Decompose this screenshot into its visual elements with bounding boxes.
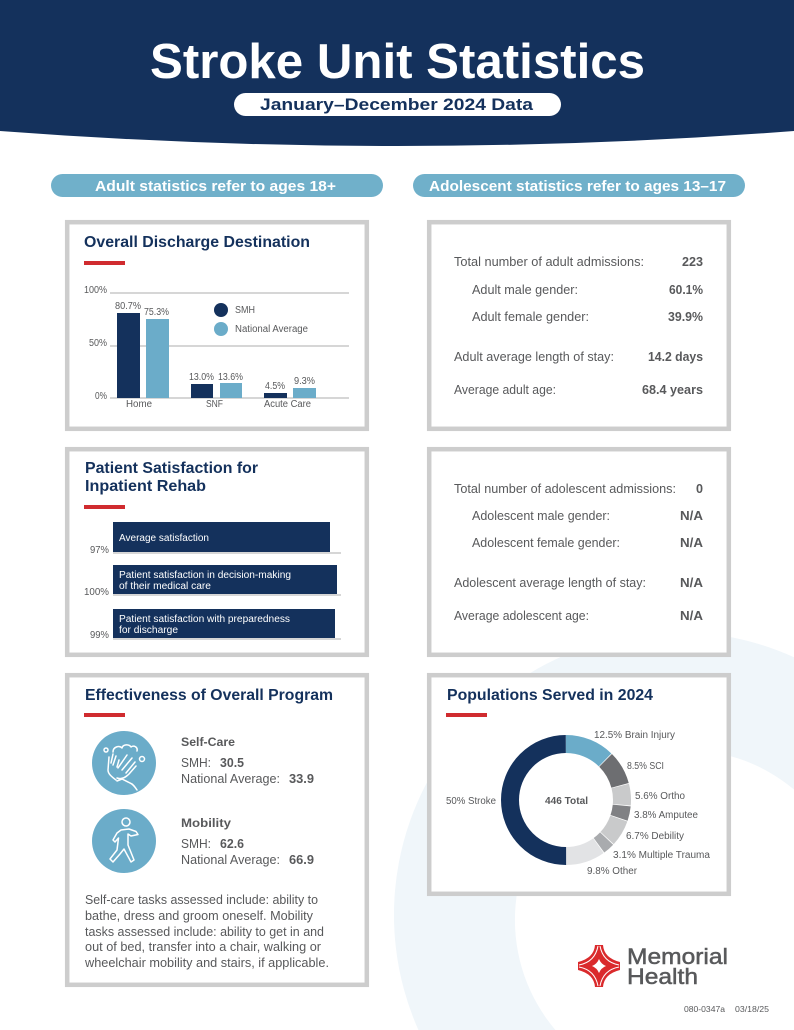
icon: washing hands xyxy=(92,731,156,795)
adolescent age row: Average adolescent age: xyxy=(454,609,589,623)
bar chart: satisfaction: 100% xyxy=(84,587,109,598)
logo: Memorial Health: Memorial xyxy=(627,944,728,969)
donut labels: 12.5% Brain Injury xyxy=(594,730,675,741)
bar chart: discharge destination: Home xyxy=(126,399,152,410)
donut chart xyxy=(510,744,622,856)
self-care stats: 33.9 xyxy=(289,772,314,786)
donut labels: 8.5% SCI xyxy=(627,761,664,772)
bar chart: satisfaction: Average satisfaction xyxy=(119,533,209,544)
donut labels: 6.7% Debility xyxy=(626,831,684,842)
heading: discharge: Overall Discharge Destination xyxy=(84,234,310,251)
adult length of stay row: Adult average length of stay: xyxy=(454,350,614,364)
mobility stats: 62.6 xyxy=(220,837,244,851)
bar chart: satisfaction: of their medical care xyxy=(119,581,211,592)
donut labels: 9.8% Other xyxy=(587,866,638,877)
adult male row xyxy=(472,283,703,297)
adolescent age row xyxy=(454,609,703,623)
footer codes: 03/18/25 xyxy=(735,1005,770,1014)
bar chart: discharge destination: 13.0% xyxy=(189,372,214,383)
adult female row: Adult female gender: xyxy=(472,310,589,324)
bar chart: satisfaction xyxy=(84,522,341,641)
adult age note pill xyxy=(51,174,383,197)
adult age note pill: Adult statistics refer to ages 18+ xyxy=(95,178,336,195)
adult admissions row: Total number of adult admissions: xyxy=(454,255,644,269)
adult admissions row: 223 xyxy=(682,255,703,269)
adult age row: 68.4 years xyxy=(642,383,703,397)
adolescent age note pill: Adolescent statistics refer to ages 13–17 xyxy=(429,178,726,195)
donut labels: 50% Stroke xyxy=(446,796,496,807)
adolescent female row: Adolescent female gender: xyxy=(472,536,620,550)
adult male row: 60.1% xyxy=(669,283,703,297)
adolescent male row: Adolescent male gender: xyxy=(472,509,610,523)
adolescent length of stay row: Adolescent average length of stay: xyxy=(454,576,646,590)
bar chart: satisfaction: 97% xyxy=(90,545,109,556)
mobility stats xyxy=(181,816,314,867)
explanatory paragraph: Self-care tasks assessed include: ability to xyxy=(85,893,318,907)
self-care stats: Self-Care xyxy=(181,735,235,749)
chart legend: SMH xyxy=(235,305,255,316)
self-care stats xyxy=(181,735,314,786)
bar chart: satisfaction: for discharge xyxy=(119,625,178,636)
panel: overall discharge destination xyxy=(67,222,367,429)
mobility stats: Mobility xyxy=(181,816,231,830)
self-care stats: SMH: xyxy=(181,756,211,770)
logo: Memorial Health: Health xyxy=(627,964,698,989)
bar chart: discharge destination: 13.6% xyxy=(218,372,243,383)
mobility stats: National Average: xyxy=(181,853,280,867)
bar chart: discharge destination: 9.3% xyxy=(294,376,315,387)
adult female row: 39.9% xyxy=(668,310,703,324)
explanatory paragraph: wheelchair mobility and stairs, if applicable. xyxy=(84,956,329,970)
adult age row xyxy=(454,383,703,397)
adolescent age note pill xyxy=(413,174,745,197)
bar chart: discharge destination: 50% xyxy=(89,338,107,349)
adult length of stay row xyxy=(454,350,703,364)
panel: patient satisfaction xyxy=(67,449,367,655)
adolescent female row: N/A xyxy=(680,536,703,550)
explanatory paragraph: tasks assessed include: ability to get in and xyxy=(85,925,324,939)
mobility stats: 66.9 xyxy=(289,853,314,867)
bar chart: discharge destination xyxy=(84,285,349,410)
panel: populations served xyxy=(429,675,729,894)
adult male row: Adult male gender: xyxy=(472,283,578,297)
date range pill: January–December 2024 Data xyxy=(260,95,534,114)
bar chart: discharge destination: 75.3% xyxy=(144,307,169,318)
bar chart: discharge destination: 100% xyxy=(84,285,107,296)
icon: logo star xyxy=(578,945,620,987)
adolescent age row: N/A xyxy=(680,609,703,623)
bar chart: satisfaction: Patient satisfaction with preparedness xyxy=(119,614,290,625)
bar chart: discharge destination: Acute Care xyxy=(264,399,311,410)
donut labels: 5.6% Ortho xyxy=(635,791,685,802)
bar chart: satisfaction: 99% xyxy=(90,630,109,641)
donut labels: 3.8% Amputee xyxy=(634,810,698,821)
adolescent admissions row: Total number of adolescent admissions: xyxy=(454,482,676,496)
footer codes xyxy=(684,1005,770,1014)
adolescent male row xyxy=(472,509,703,523)
footer codes: 080-0347a xyxy=(684,1005,726,1014)
self-care stats: 30.5 xyxy=(220,756,244,770)
heading: satisfaction: Inpatient Rehab xyxy=(85,478,206,495)
logo: Memorial Health xyxy=(578,944,728,989)
heading: populations: Populations Served in 2024 xyxy=(447,687,653,704)
adult length of stay row: 14.2 days xyxy=(648,350,703,364)
mobility stats: SMH: xyxy=(181,837,211,851)
panel: adolescent statistics xyxy=(429,449,729,655)
explanatory paragraph: out of bed, transfer into a chair, walking or xyxy=(85,940,321,954)
adolescent length of stay row: N/A xyxy=(680,576,703,590)
adult female row xyxy=(472,310,703,324)
explanatory paragraph: bathe, dress and groom oneself. Mobility xyxy=(85,909,314,923)
adolescent admissions row: 0 xyxy=(696,482,703,496)
date range pill xyxy=(234,93,561,116)
heading: effectiveness: Effectiveness of Overall Program xyxy=(85,687,333,704)
adult age row: Average adult age: xyxy=(454,383,556,397)
bar chart: discharge destination: SNF xyxy=(206,399,223,410)
icon: walking person xyxy=(92,809,156,873)
header banner xyxy=(0,0,794,146)
bar chart: discharge destination: 4.5% xyxy=(265,381,285,392)
title: Stroke Unit Statistics xyxy=(150,35,645,89)
bar chart: satisfaction: Patient satisfaction in decision-making xyxy=(119,570,291,581)
donut labels: 446 Total xyxy=(545,796,588,807)
bar chart: discharge destination: 80.7% xyxy=(115,301,141,312)
self-care stats: National Average: xyxy=(181,772,280,786)
donut labels xyxy=(446,730,710,877)
background ring xyxy=(394,632,794,1030)
chart legend: National Average xyxy=(235,324,308,335)
chart legend xyxy=(214,303,308,336)
panel: effectiveness of overall program xyxy=(67,675,367,985)
panel: adult statistics xyxy=(429,222,729,429)
bar chart: discharge destination: 0% xyxy=(95,391,107,402)
donut labels: 3.1% Multiple Trauma xyxy=(613,850,710,861)
heading: satisfaction: Patient Satisfaction for xyxy=(85,460,258,477)
adolescent female row xyxy=(472,536,703,550)
adolescent male row: N/A xyxy=(680,509,703,523)
